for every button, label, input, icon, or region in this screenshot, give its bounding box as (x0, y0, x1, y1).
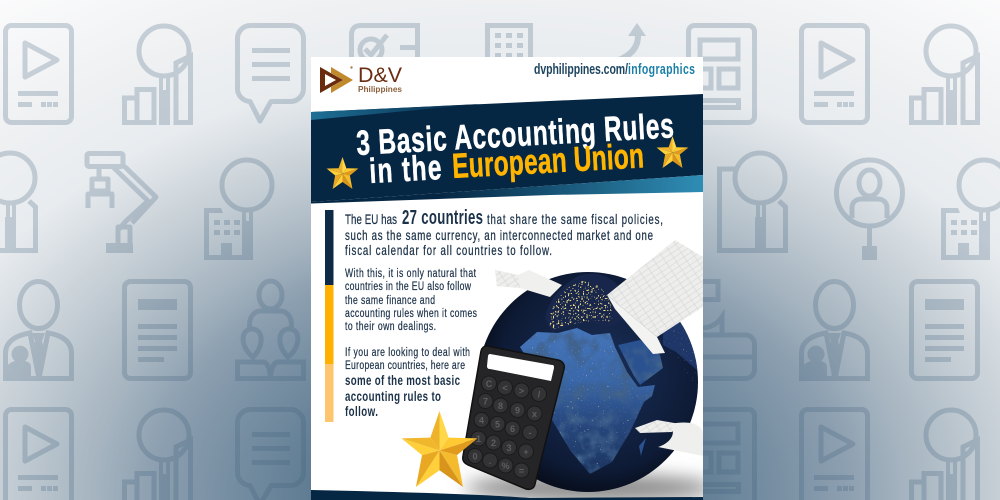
title text: 3 Basic Accounting Rules (355, 107, 675, 163)
calculator key labels: 4 (479, 416, 484, 426)
calculator key labels: 7 (483, 396, 488, 406)
icon: speech bubble (237, 25, 304, 121)
title text (355, 107, 676, 192)
calculator key labels: 0 (472, 452, 478, 462)
calculator key labels: C (486, 379, 493, 389)
map: Madagascar (639, 438, 646, 456)
calculator key labels: 9 (515, 406, 520, 416)
body text: accounting rules when it comes (345, 308, 477, 320)
icon: business person (6, 282, 72, 381)
panel: infographic card (311, 57, 715, 500)
calculator key labels: 8 (498, 401, 503, 411)
icon: calculator form (688, 26, 754, 122)
calculator key labels: / (538, 390, 541, 400)
map: Asia east (663, 320, 698, 370)
calculator key labels: 1 (476, 434, 481, 444)
logo (320, 64, 402, 94)
intro text: The EU has (345, 213, 397, 227)
calculator (463, 346, 564, 489)
calculator key labels: % (501, 461, 510, 471)
icon: magnifier document (0, 153, 36, 253)
icon: building (488, 26, 530, 122)
body text: If you are looking to deal with (345, 347, 470, 359)
body text: accounting rules to (345, 390, 441, 404)
body text: follow. (345, 405, 378, 419)
intro text (345, 206, 663, 258)
logo: Philippines (358, 84, 402, 94)
calculator key labels: + (523, 447, 529, 457)
logo: D&V (358, 64, 402, 87)
icon: hand over stack (688, 282, 754, 378)
icon: magnifier chart (912, 26, 978, 125)
calculator key labels: = (519, 466, 524, 476)
icon: play document (6, 410, 72, 500)
icon: play document (6, 26, 72, 122)
icon: business person (802, 282, 868, 381)
globe illustration (478, 272, 700, 492)
calculator key labels (472, 379, 541, 476)
icon: robot arm (87, 154, 156, 253)
website url: infographics (628, 60, 695, 77)
body text: to their own dealings. (345, 321, 436, 333)
icon: right star (656, 136, 688, 168)
calculator screen (487, 354, 554, 381)
icon: speech bubble (237, 409, 304, 500)
calculator key labels: < (502, 383, 508, 393)
paper: bottom right (635, 420, 703, 456)
paper: top left (495, 270, 562, 297)
icon: magnifier building (941, 160, 1000, 260)
icon: play document (802, 26, 868, 122)
map: Africa (520, 328, 655, 474)
globe shadow (465, 474, 715, 500)
calculator keys (468, 376, 546, 478)
icon: left star (326, 157, 358, 189)
icon: group of people (238, 281, 304, 378)
calculator key labels: 6 (510, 424, 515, 434)
intro text: such as the same currency, an interconnected market and one (345, 229, 653, 243)
intro text: 27 countries (402, 206, 483, 229)
calculator key labels: > (519, 386, 524, 396)
body text: European countries, here are (345, 360, 465, 372)
title text: European Union (451, 137, 645, 186)
calculator key labels: 5 (495, 420, 500, 430)
icon: magnifier chart (124, 410, 190, 500)
icon: magnifier chart (124, 26, 190, 125)
colour bar (325, 210, 334, 422)
icon: checklist (352, 26, 419, 122)
icon: magnifier document (720, 153, 786, 253)
website url (534, 60, 695, 77)
body text: some of the most basic (345, 374, 460, 388)
website url: dvphilippines.com/ (534, 60, 628, 77)
icon: magnifier building (204, 160, 272, 260)
icon: magnifier person (836, 160, 902, 260)
calculator key labels: . (489, 456, 491, 466)
calculator key labels: - (528, 428, 532, 438)
icon: document (124, 282, 190, 378)
map: Europe (545, 274, 618, 328)
intro text: fiscal calendar for all countries to follow. (345, 244, 552, 258)
icon: large gold star (402, 411, 478, 487)
calculator key labels: 3 (506, 443, 512, 453)
icon: growth arrow (618, 23, 646, 62)
icon: play document (802, 410, 868, 500)
calculator key labels: x (532, 409, 537, 419)
intro text: that share the same fiscal policies, (487, 213, 663, 227)
body text (345, 268, 477, 419)
body text: With this, it is only natural that (345, 268, 476, 280)
calculator key labels: 2 (491, 438, 496, 448)
icon: calculator form (688, 410, 754, 500)
icon: magnifier chart (912, 410, 978, 500)
icon: document (912, 282, 978, 378)
paper: top right (607, 240, 703, 354)
title banner (311, 94, 703, 204)
map: Arabia (618, 340, 663, 385)
body text: the same finance and (345, 295, 435, 307)
title text: in the (368, 149, 442, 191)
body text: countries in the EU also follow (345, 281, 471, 293)
bottom banner strip (311, 490, 703, 500)
